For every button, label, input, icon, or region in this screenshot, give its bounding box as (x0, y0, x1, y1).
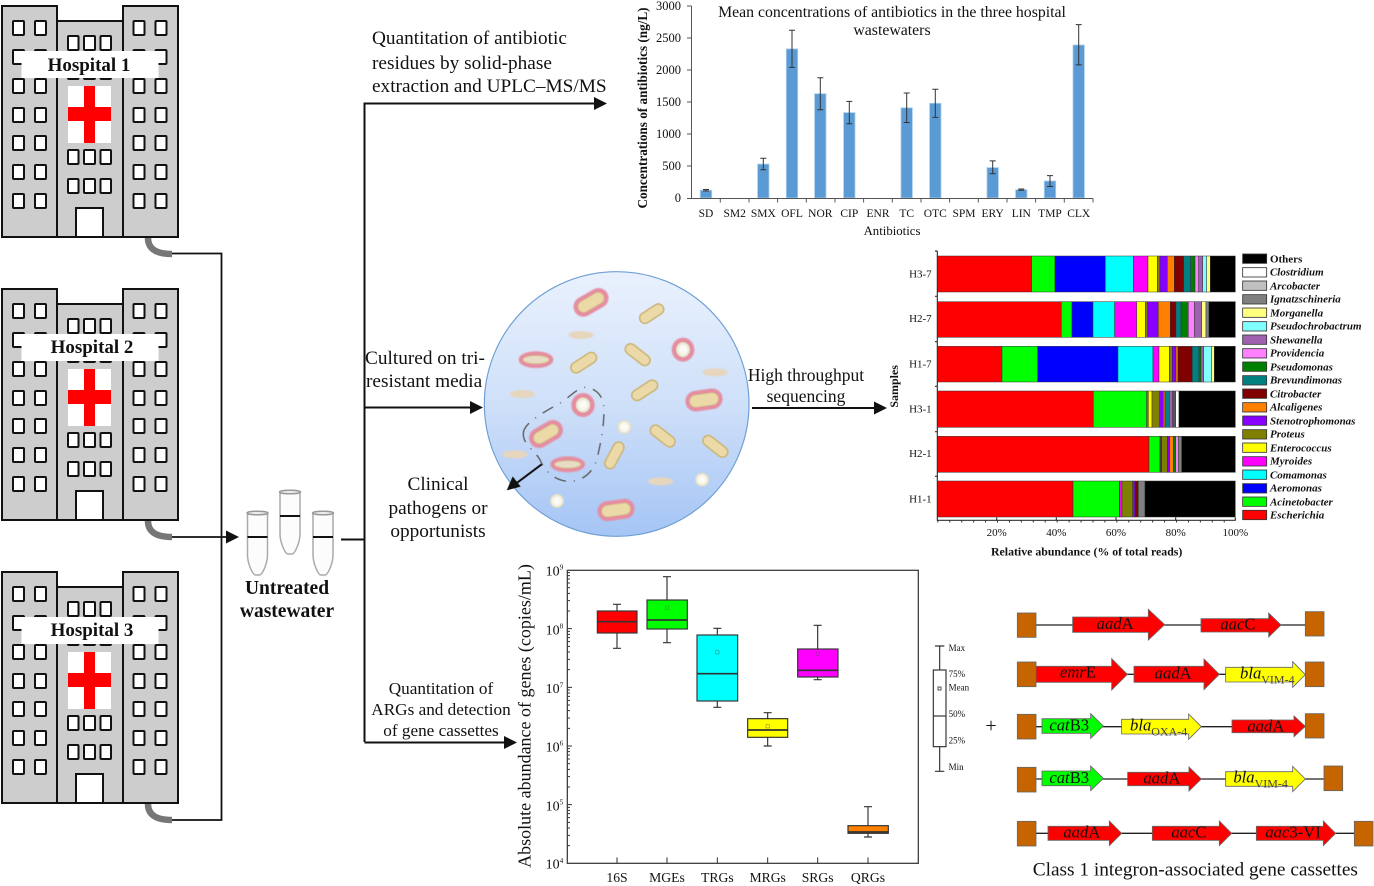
y axis title: Absolute abundance of genes (copies/mL) (515, 564, 536, 868)
cassette row 2: emrE (1060, 663, 1096, 682)
legend: Acinetobacter (1269, 496, 1334, 508)
hospital 1 (2, 6, 178, 254)
legend: Clostridium (1270, 267, 1324, 279)
legend: Comamonas (1270, 469, 1327, 481)
sample labels: H1-1 (909, 493, 932, 505)
hospital 1 label: Hospital 1 (48, 55, 130, 76)
y tick labels: 2000 (656, 63, 681, 77)
y tick labels: 4 (560, 856, 564, 865)
sample labels (909, 268, 932, 505)
category labels: 16S (606, 870, 628, 885)
x tick labels: LIN (1012, 208, 1032, 220)
cassette row 3: OXA-4 (1151, 725, 1187, 739)
y tick labels: 5 (560, 798, 564, 807)
y tick labels (546, 563, 564, 873)
cassette row 3: bla (1130, 716, 1151, 735)
cassette row 5 (1017, 821, 1373, 846)
y tick labels: 6 (560, 739, 564, 748)
text: quantitation of ARGs: of gene cassettes (383, 721, 499, 740)
box plot key: 50% (949, 709, 966, 719)
dish (484, 272, 749, 536)
y tick labels: 10 (546, 682, 560, 697)
text: high throughput sequencing: High throughput (748, 365, 864, 385)
cassette row 4: aadA (1143, 768, 1180, 787)
bars (700, 45, 1084, 198)
y axis title: Samples (887, 365, 901, 408)
text: high throughput sequencing: sequencing (767, 386, 846, 406)
x tick labels: OFL (781, 208, 803, 220)
arrow to clinical pathogens (507, 464, 542, 490)
cassette row 2: bla (1240, 664, 1261, 683)
collection pipes and arrow to samples (172, 254, 239, 820)
axis ticks (567, 573, 868, 863)
axes (935, 251, 1236, 520)
y tick labels: 10 (546, 623, 560, 638)
bar chart: antibiotic concentrations (635, 0, 1093, 238)
text: clinical pathogens: opportunists (390, 521, 486, 542)
gene cassettes (1017, 609, 1373, 880)
legend: Aeromonas (1269, 483, 1322, 495)
x tick labels: 20% (987, 527, 1007, 539)
box SRGs (798, 625, 838, 680)
x tick labels: ERY (982, 208, 1005, 220)
y tick labels: 500 (662, 159, 681, 173)
y tick labels: 8 (560, 622, 564, 631)
x tick labels: SMX (751, 208, 776, 220)
y tick labels: 10 (546, 740, 560, 755)
x tick labels: CIP (840, 208, 858, 220)
category labels: QRGs (851, 870, 885, 885)
legend: Ignatzschineria (1269, 294, 1341, 306)
petri dish with bacteria (484, 272, 749, 536)
x tick labels: SM2 (724, 208, 746, 220)
legend: Arcobacter (1269, 280, 1321, 292)
cassette row 2: aadA (1155, 664, 1192, 683)
legend: Pseudochrobactrum (1270, 321, 1362, 333)
x axis title: Relative abundance (% of total reads) (991, 545, 1182, 559)
legend: Alcaligenes (1269, 402, 1322, 414)
box QRGs (848, 807, 888, 837)
bar H1-1 (937, 481, 1235, 517)
box plot key (933, 643, 970, 772)
x axis title: Antibiotics (864, 224, 920, 238)
box plot key: Mean (949, 683, 970, 693)
cassette row 4: bla (1233, 768, 1255, 787)
legend: Morganella (1269, 307, 1324, 319)
stacked bars (937, 256, 1235, 517)
hospital 2 (2, 289, 178, 537)
cassette row 4 (1017, 766, 1343, 792)
y axis title: Concentrations of antibiotics (ng/L) (635, 7, 650, 209)
box TRGs (697, 628, 738, 707)
legend: Citrobacter (1270, 388, 1322, 400)
category labels: MRGs (749, 870, 786, 885)
text: quantitation of antibiotic residues: extraction and UPLC–MS/MS (372, 76, 607, 97)
hospital 2 label: Hospital 2 (51, 337, 133, 358)
cassette row 2 (1017, 659, 1324, 690)
dashed pathogen outline (523, 387, 604, 481)
cassette row 1: aacC (1220, 615, 1256, 634)
cassette row 5: aacC (1171, 823, 1207, 842)
y tick labels: 7 (560, 680, 564, 689)
plain rods (569, 302, 730, 470)
cassette row 5: aadA (1063, 823, 1100, 842)
bar H2-1 (937, 436, 1235, 472)
box MRGs (748, 713, 788, 746)
legend: Others (1270, 253, 1302, 265)
cassette row 4: catB3 (1049, 768, 1089, 787)
category labels: TRGs (701, 870, 734, 885)
x tick labels: 40% (1046, 527, 1066, 539)
text: cultured on tri-resistant media: resistant media (366, 371, 483, 392)
legend: Shewanella (1270, 334, 1323, 346)
x tick labels: 80% (1166, 527, 1186, 539)
sample labels: H2-7 (909, 313, 932, 325)
text: quantitation of antibiotic residues: residues by solid-phase (372, 53, 552, 74)
sample labels: H2-1 (909, 448, 932, 460)
box plot key: Max (949, 643, 966, 653)
category labels: MGEs (649, 870, 685, 885)
hospital 3 label: Hospital 3 (51, 620, 133, 641)
bar H1-7 (937, 346, 1235, 382)
plus sign: + (985, 715, 997, 737)
sample labels: H3-1 (909, 403, 932, 415)
bar H3-7 (937, 256, 1235, 292)
category labels (606, 870, 885, 885)
y tick labels: 2500 (656, 31, 681, 45)
x tick labels: CLX (1067, 208, 1091, 220)
text: quantitation of antibiotic residues: Quantitation of antibiotic (372, 28, 567, 49)
box plot key: 75% (949, 669, 966, 679)
y tick labels (656, 0, 681, 205)
sample labels: H3-7 (909, 268, 932, 280)
x tick labels (699, 208, 1091, 220)
legend (1243, 253, 1362, 522)
x tick labels: 100% (1223, 527, 1248, 539)
y tick labels: 10 (546, 858, 560, 873)
chart title: wastewaters (853, 22, 931, 39)
legend: Stenotrophomonas (1270, 415, 1355, 427)
legend: Brevundimonas (1269, 375, 1342, 387)
cassette row 3 (1017, 714, 1324, 739)
plot frame (567, 570, 918, 863)
sample tubes (247, 490, 334, 575)
speckled ovals (502, 331, 728, 485)
y tick labels: 1500 (656, 95, 681, 109)
cassette row 4: VIM-4 (1255, 777, 1288, 791)
x tick labels: SPM (952, 208, 976, 220)
text: quantitation of ARGs: Quantitation of (389, 679, 494, 698)
x tick labels: 60% (1106, 527, 1126, 539)
text: cultured on tri-resistant media: Cultured on tri- (365, 348, 485, 369)
error bars (703, 25, 1082, 191)
legend: Pseudomonas (1270, 361, 1333, 373)
cassette row 1 (1017, 609, 1324, 640)
text: quantitation of ARGs: ARGs and detection (371, 700, 511, 719)
stacked bar chart: relative abundance (887, 251, 1362, 559)
legend: Enterococcus (1269, 442, 1332, 454)
cassette row 2: VIM-4 (1261, 673, 1295, 687)
x tick labels: TMP (1038, 208, 1062, 220)
box plot key: Min (949, 762, 964, 772)
box MGEs (647, 577, 687, 643)
legend: Providencia (1270, 348, 1325, 360)
x tick labels: NOR (808, 208, 833, 220)
bar H3-1 (937, 391, 1235, 427)
white cocci (550, 420, 709, 508)
y tick labels: 0 (675, 191, 681, 205)
y tick labels: 10 (546, 564, 560, 579)
y tick labels: 1000 (656, 127, 681, 141)
untreated wastewater label: Untreated (245, 578, 329, 599)
pink-walled rods (523, 290, 719, 518)
cassette row 1: aadA (1097, 614, 1134, 633)
pink-walled cocci (576, 342, 690, 413)
box 16S (597, 604, 637, 648)
cassette row 3: aadA (1247, 716, 1284, 735)
bar H2-7 (937, 302, 1235, 337)
text: clinical pathogens: Clinical (407, 474, 469, 495)
x tick labels: TC (899, 208, 914, 220)
cassettes caption: Class 1 integron-associated gene cassettes (1033, 859, 1358, 880)
untreated wastewater label: wastewater (240, 601, 334, 622)
text: clinical pathogens: pathogens or (388, 498, 488, 519)
sample labels: H1-7 (909, 358, 932, 370)
y tick labels: 9 (560, 563, 564, 572)
category labels: SRGs (802, 870, 834, 885)
main branching arrows (341, 97, 887, 749)
x tick labels (987, 527, 1248, 539)
chart title: Mean concentrations of antibiotics in the three hospital (718, 4, 1067, 21)
x tick labels: SD (699, 208, 713, 220)
hospital 3 (2, 572, 178, 820)
box plot key: 25% (949, 736, 966, 746)
x tick labels: OTC (924, 208, 947, 220)
legend: Myroides (1269, 456, 1312, 468)
cassette row 3: catB3 (1049, 716, 1089, 735)
cassette row 5: aac3-VI (1265, 823, 1321, 842)
legend: Proteus (1270, 429, 1305, 441)
axes (687, 6, 1093, 202)
box plot: absolute abundance of genes (515, 563, 970, 885)
legend: Escherichia (1269, 510, 1325, 522)
pink halos (521, 287, 722, 520)
y tick labels: 10 (546, 799, 560, 814)
x tick labels: ENR (866, 208, 890, 220)
